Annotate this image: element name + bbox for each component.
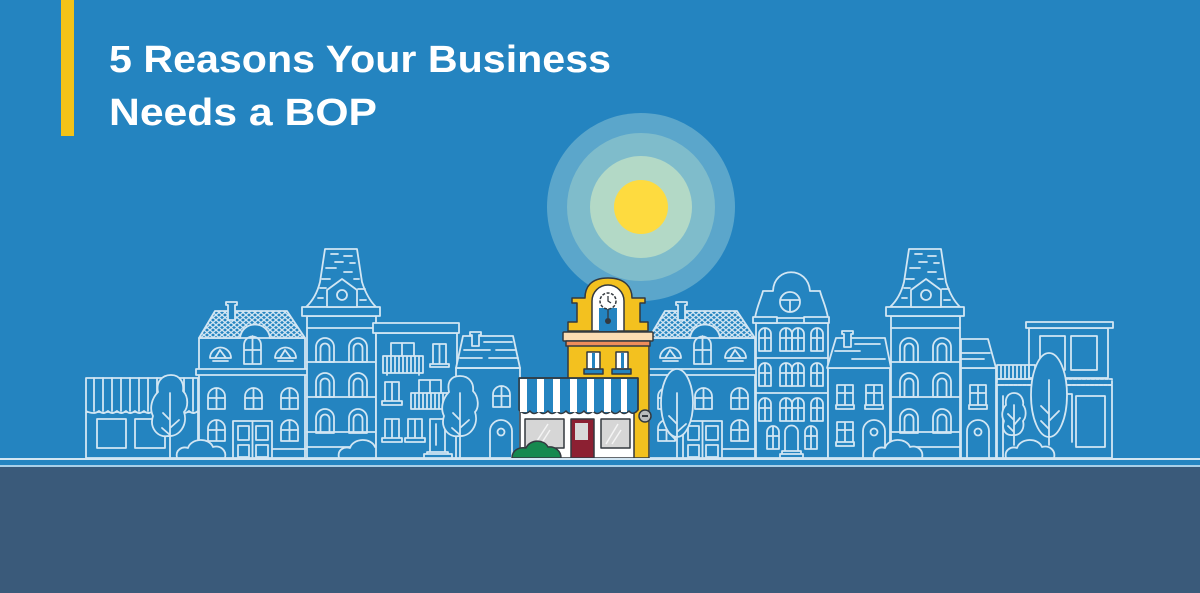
dutch gabled house (753, 272, 829, 458)
store upper facade with arch (568, 278, 648, 331)
striped awning (519, 378, 638, 414)
house: mansard with dormers (196, 302, 309, 458)
tree: large oval (1031, 353, 1067, 445)
tower house (886, 249, 964, 458)
red door (571, 419, 594, 458)
sidewalk and road (0, 458, 1200, 593)
apartment with balconies (373, 323, 459, 458)
shop with striped awning (86, 378, 198, 458)
tree: small round (1002, 393, 1026, 445)
green bush (512, 441, 561, 458)
title (109, 39, 611, 134)
small house with door (456, 332, 520, 458)
tree: left round (151, 375, 187, 458)
yellow accent bar (61, 0, 74, 136)
bush (177, 440, 225, 458)
tree: tall oval (661, 369, 693, 458)
sun with concentric rings (547, 113, 735, 301)
tower house (302, 249, 380, 458)
bush (874, 440, 922, 458)
bush (339, 440, 387, 458)
street skyline: left buildings (86, 249, 520, 458)
storefront windows (525, 419, 630, 448)
narrow house with door (961, 339, 996, 458)
house: mansard behind main store (646, 302, 759, 458)
upper windows (584, 352, 631, 374)
tree: right of apartment (442, 376, 478, 458)
street skyline: right buildings (646, 249, 1113, 458)
title: 5 Reasons Your Business (109, 39, 611, 81)
main street store in colour (512, 278, 653, 458)
bush (1006, 440, 1054, 458)
cornice ledge (563, 332, 653, 346)
hanging sign (639, 410, 651, 422)
clock niche (592, 285, 624, 331)
store lower yellow wall (568, 345, 649, 458)
store ground floor (520, 410, 634, 458)
small house with two windows (827, 331, 891, 458)
modern building with balcony (997, 322, 1113, 458)
title: Needs a BOP (109, 92, 377, 134)
